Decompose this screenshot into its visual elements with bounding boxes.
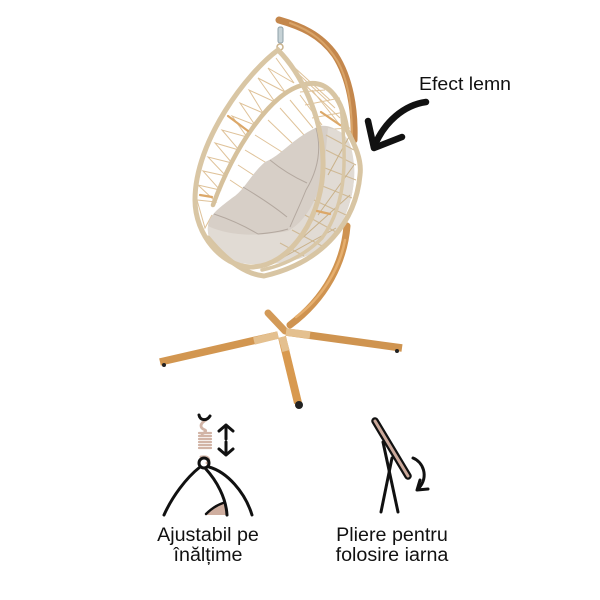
label: folding for winter: Pliere pentru [336, 524, 448, 546]
swivel hook [277, 27, 283, 50]
spring hook [199, 420, 211, 463]
label: Efect lemn: Efect lemn [419, 73, 511, 94]
label: folding for winter: folosire iarna [336, 544, 448, 566]
rope weave [197, 57, 350, 228]
label: adjustable height: înălțime [173, 544, 243, 566]
stand: base legs [160, 313, 402, 409]
up and down arrows [219, 425, 233, 455]
seat cushion [208, 126, 356, 264]
stand: curved pole [279, 20, 354, 325]
hanging chair product [160, 20, 402, 409]
icon: adjustable height [164, 415, 252, 515]
label: adjustable height: Ajustabil pe [157, 524, 259, 546]
icon: folding for winter [375, 421, 428, 512]
arrow: pointing to wood effect [368, 102, 426, 148]
chair rings [195, 50, 360, 276]
